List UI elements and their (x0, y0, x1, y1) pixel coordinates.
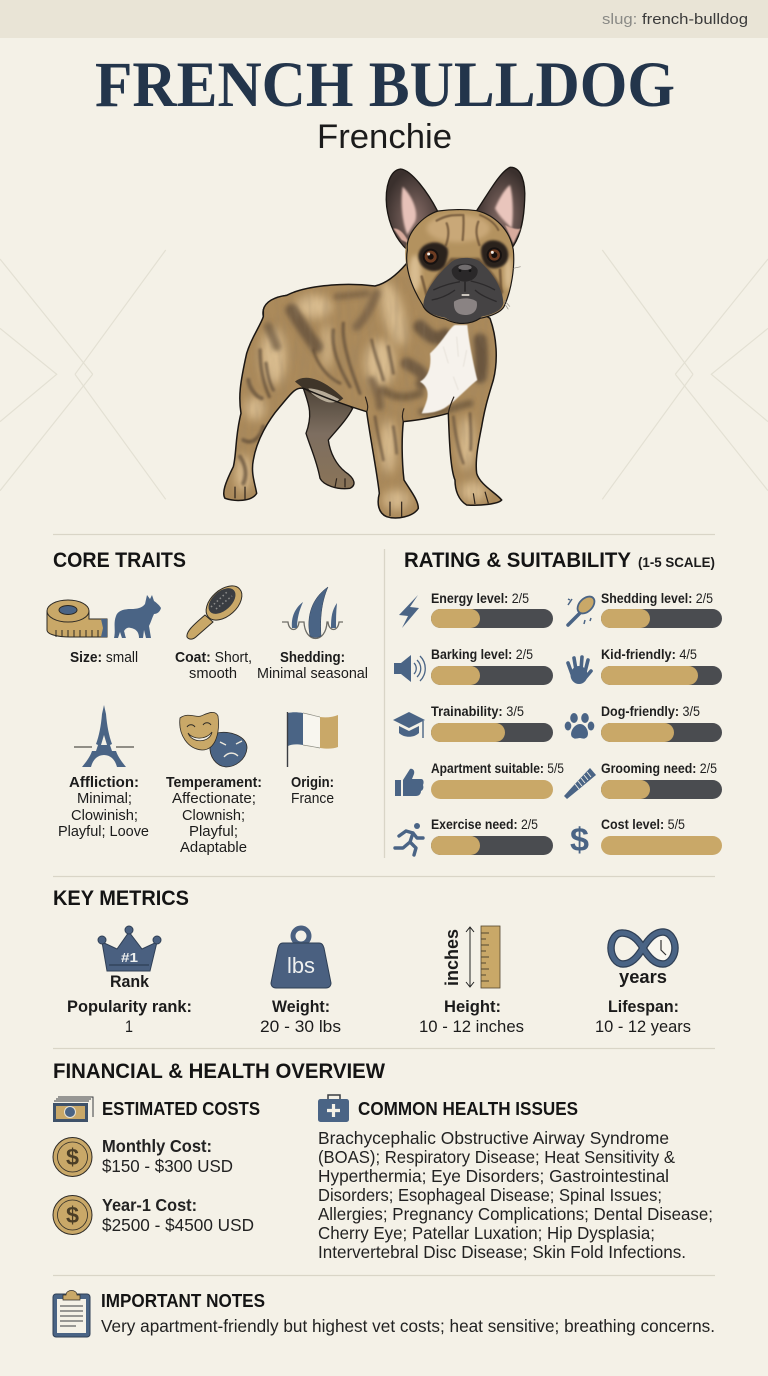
text: health issues list: Hyperthermia; Eye Disorders; Gastrointestinal (318, 1166, 669, 1186)
icon: comb (564, 768, 596, 799)
icon: graduation cap (393, 712, 425, 738)
body outline (224, 263, 502, 518)
metric: popularity rank: Popularity rank: (67, 998, 192, 1016)
icon: lightning bolt (399, 595, 419, 628)
trait: affliction: Affliction: (69, 774, 139, 791)
metric: weight: Weight: (272, 998, 330, 1016)
trait: coat (175, 649, 252, 682)
trait: origin: France (291, 790, 334, 807)
rating: grooming need (601, 761, 722, 799)
trait: shedding: Minimal seasonal (257, 665, 368, 682)
icon: crown rank (98, 926, 161, 971)
metric: popularity rank (67, 972, 192, 1036)
icon: clipboard (53, 1290, 90, 1337)
rating: dog-friendly (601, 704, 722, 742)
head (405, 210, 521, 323)
trait: coat: Coat: Short, (175, 649, 252, 666)
rating: dog-friendly: Dog-friendly: 3/5 (601, 704, 700, 719)
text: health issues list: Intervertebral Disc Disease; Skin Fold Infections. (318, 1242, 686, 1262)
trait: temperament: Adaptable (180, 839, 247, 856)
metric: weight: 20 - 30 lbs (260, 1018, 341, 1036)
illustration: french bulldog (220, 167, 525, 523)
trait: temperament: Clownish; (182, 807, 245, 824)
metric: lifespan: years (619, 966, 667, 987)
trait: affliction: Clowinish; (71, 807, 138, 824)
heading: important notes: IMPORTANT NOTES (101, 1290, 265, 1311)
text: health issues list: Disorders; Esophageal Disease; Spinal Issues; (318, 1185, 662, 1205)
rating: apartment suitable: Apartment suitable: 5/5 (431, 761, 564, 776)
icon: speaker (394, 655, 425, 682)
trait: coat: smooth (189, 665, 237, 682)
panel: financial and health overview (53, 1059, 713, 1262)
icon: hair follicle (282, 587, 343, 638)
trait: shedding: Shedding: (280, 649, 345, 666)
trait: origin (291, 774, 334, 807)
rating: exercise need: Exercise need: 2/5 (431, 817, 538, 832)
rating: cost level: Cost level: 5/5 (601, 817, 685, 832)
body (220, 263, 507, 523)
white chest (420, 325, 477, 413)
text: notes body: Very apartment-friendly but highest vet costs; heat sensitive; breathing concerns. (101, 1316, 715, 1336)
icon: weight lbs: lbs (287, 953, 315, 978)
title: FRENCH BULLDOG (95, 49, 675, 121)
icon: hand (568, 657, 591, 684)
heading: rating and suitability: (1-5 SCALE) (638, 554, 715, 570)
cost: year one (102, 1195, 254, 1235)
top slug bar (0, 0, 768, 38)
icon: running person (395, 823, 423, 855)
icon: crown rank: #1 (121, 950, 138, 965)
rating: grooming need: Grooming need: 2/5 (601, 761, 717, 776)
top slug bar: slug: french-bulldog (602, 11, 748, 28)
icon: coin year one (53, 1196, 92, 1234)
rating: kid-friendly (601, 647, 722, 685)
icon: theatre masks (180, 712, 247, 767)
cost: monthly: $150 - $300 USD (102, 1156, 233, 1176)
rating: energy level: Energy level: 2/5 (431, 591, 529, 606)
text: health issues list (318, 1128, 713, 1262)
dark eye sockets (418, 240, 508, 271)
text: health issues list: (BOAS); Respiratory Disease; Heat Sensitivity & (318, 1147, 675, 1167)
rating: exercise need (431, 817, 553, 855)
heading: key metrics: KEY METRICS (53, 886, 189, 910)
icon: coin year one: $ (66, 1202, 79, 1228)
rating: cost level (601, 817, 722, 855)
rating: energy level (431, 591, 553, 628)
left ear (386, 169, 437, 250)
trait: affliction (58, 774, 149, 840)
trait: temperament (166, 774, 262, 856)
text: health issues list: Cherry Eye; Patellar Luxation; Hip Dysplasia; (318, 1223, 655, 1243)
icon: medical kit (318, 1095, 349, 1122)
icon: thumbs up (395, 769, 424, 796)
text: health issues list: Brachycephalic Obstructive Airway Syndrome (318, 1128, 669, 1148)
icon: paw (565, 713, 594, 739)
icon: tape measure (47, 600, 107, 637)
panel: key metrics (53, 886, 691, 1036)
rating: apartment suitable (431, 761, 564, 799)
subtitle: Frenchie (317, 118, 452, 156)
heading: rating and suitability: RATING & SUITABILITY (404, 548, 631, 572)
muzzle (423, 258, 503, 323)
rating: trainability: Trainability: 3/5 (431, 704, 524, 719)
trait: affliction: Playful; Loove (58, 823, 149, 840)
tail (263, 295, 287, 317)
icon: dog silhouette (114, 595, 161, 638)
leg and toe lines (235, 397, 488, 517)
icon: coin monthly: $ (66, 1144, 79, 1170)
metric: lifespan (595, 966, 691, 1036)
icon: dollar sign: $ (570, 821, 589, 858)
cost: year one: Year-1 Cost: (102, 1195, 197, 1215)
trait: shedding (257, 649, 368, 682)
metric: weight (260, 998, 341, 1036)
icon: height ruler (442, 926, 500, 988)
icon: brush (187, 579, 248, 639)
icon: infinity clock (611, 932, 675, 964)
icon: cash stack (53, 1097, 93, 1122)
metric: lifespan: 10 - 12 years (595, 1018, 691, 1036)
icon: grooming brush (568, 593, 598, 625)
heading: estimated costs: ESTIMATED COSTS (102, 1098, 260, 1119)
rating: kid-friendly: Kid-friendly: 4/5 (601, 647, 697, 662)
trait: temperament: Affectionate; (172, 790, 256, 807)
trait: origin: Origin: (291, 774, 334, 791)
heading: common health issues: COMMON HEALTH ISSUES (358, 1098, 578, 1119)
far hind leg (303, 388, 354, 489)
icon: height ruler: inches (442, 929, 462, 986)
metric: popularity rank: 1 (125, 1018, 133, 1036)
panel: core traits (47, 548, 368, 856)
metric: popularity rank: Rank (110, 972, 150, 991)
cost: monthly (102, 1136, 233, 1176)
belly shadow (295, 378, 343, 403)
metric: lifespan: Lifespan: (608, 998, 679, 1016)
trait: affliction: Minimal; (77, 790, 132, 807)
icon: eiffel tower (74, 705, 134, 767)
trait: size: Size: small (70, 649, 138, 666)
heading: financial and health: FINANCIAL & HEALTH OVERVIEW (53, 1059, 386, 1083)
heading: core traits: CORE TRAITS (53, 548, 186, 572)
cost: year one: $2500 - $4500 USD (102, 1215, 254, 1235)
trait: temperament: Playful; (189, 823, 238, 840)
rating: shedding level: Shedding level: 2/5 (601, 591, 713, 606)
rating: barking level: Barking level: 2/5 (431, 647, 533, 662)
rating: trainability (431, 704, 553, 742)
panel: rating and suitability (393, 548, 722, 858)
panel: important notes (53, 1290, 715, 1337)
shadow around muzzle (428, 260, 502, 293)
metric: height (419, 998, 524, 1036)
chest fur detail (443, 337, 467, 390)
cost: monthly: Monthly Cost: (102, 1136, 212, 1156)
metric: height: 10 - 12 inches (419, 1018, 524, 1036)
trait: temperament: Temperament: (166, 774, 262, 791)
icon: coin monthly (53, 1138, 92, 1176)
icon: french flag (288, 712, 338, 767)
rating: barking level (431, 647, 553, 685)
metric: height: Height: (444, 998, 501, 1016)
text: health issues list: Allergies; Pregnancy Complications; Dental Disease; (318, 1204, 713, 1224)
rating: shedding level (601, 591, 722, 628)
icon: weight lbs (271, 928, 331, 988)
right ear (477, 167, 525, 246)
